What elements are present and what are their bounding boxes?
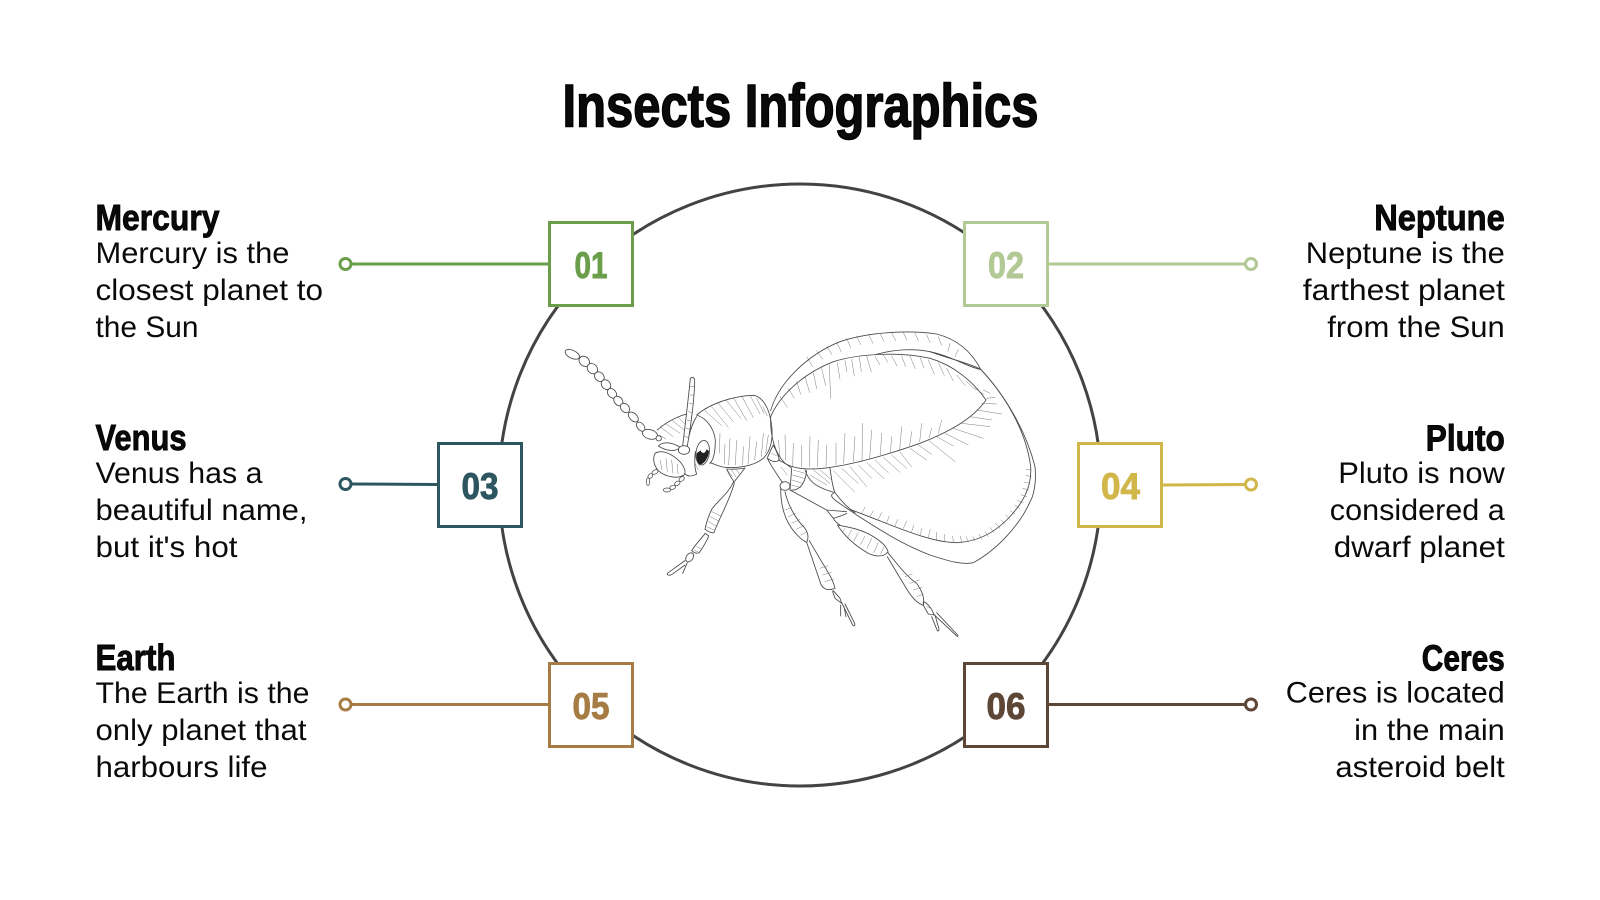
description: Pluto: considered a	[1330, 494, 1505, 527]
text block: Earth	[96, 637, 310, 784]
description: Neptune: from the Sun	[1327, 311, 1505, 344]
text block: Mercury	[96, 197, 323, 344]
large circle	[499, 184, 1101, 786]
text block: Ceres	[1286, 638, 1505, 784]
number box 03: 03	[462, 465, 498, 507]
connector line 02	[1049, 258, 1256, 270]
connector line 05	[340, 699, 549, 710]
description: Ceres: in the main	[1354, 714, 1505, 747]
beetle thorax and underside	[767, 445, 855, 513]
description: Neptune	[1303, 237, 1506, 344]
title: Insects Infographics	[562, 72, 1038, 140]
description: Venus: but it's hot	[96, 531, 238, 564]
text block: Neptune	[1303, 197, 1506, 344]
text block: Pluto	[1330, 418, 1505, 564]
description: Ceres	[1286, 676, 1505, 784]
text block: Venus	[96, 417, 308, 564]
heading: Pluto: Pluto	[1426, 418, 1505, 458]
connector line 03	[340, 478, 438, 490]
description: Mercury	[96, 237, 323, 344]
description: Mercury: the Sun	[96, 311, 198, 344]
description: Venus: beautiful name,	[96, 494, 308, 527]
connector line 01	[340, 258, 549, 270]
description: Neptune: Neptune is the	[1306, 237, 1505, 270]
beetle head and eye	[654, 413, 711, 477]
beetle front leg	[667, 468, 745, 575]
description: Pluto	[1330, 457, 1505, 564]
heading: Earth: Earth	[96, 637, 176, 678]
description: Ceres: Ceres is located	[1286, 676, 1505, 710]
description: Pluto: dwarf planet	[1334, 531, 1505, 564]
description: Earth: harbours life	[96, 751, 268, 784]
number box 06	[964, 664, 1048, 746]
beetle hind leg	[790, 490, 958, 636]
description: Mercury: Mercury is the	[96, 237, 290, 270]
number box 03	[438, 444, 522, 526]
number box 05	[550, 664, 632, 746]
beetle pronotum	[697, 395, 772, 468]
beetle underside hatching	[772, 453, 832, 488]
number box 04	[1078, 444, 1162, 526]
description: Earth	[96, 677, 310, 784]
description: Venus	[96, 457, 308, 564]
description: Mercury: closest planet to	[96, 274, 323, 307]
description: Ceres: asteroid belt	[1335, 751, 1505, 784]
beetle wing hairs	[833, 390, 1002, 492]
number box 02: 02	[988, 244, 1024, 286]
beetle wings and wing cases	[771, 332, 1035, 563]
description: Venus: Venus has a	[96, 457, 263, 490]
description: Earth: The Earth is the	[96, 677, 310, 710]
heading: Ceres: Ceres	[1422, 638, 1505, 678]
number box 01	[550, 222, 632, 306]
beetle palps	[646, 469, 685, 492]
beetle antennae	[564, 347, 695, 454]
heading: Neptune: Neptune	[1374, 197, 1505, 238]
heading: Mercury: Mercury	[96, 197, 220, 238]
number box 04: 04	[1101, 465, 1140, 507]
beetle wing hatching	[778, 333, 984, 467]
beetle middle leg	[780, 482, 855, 626]
connector line 06	[1049, 699, 1256, 710]
heading: Venus: Venus	[96, 417, 186, 458]
illustration: beetle	[564, 332, 1035, 636]
description: Pluto: Pluto is now	[1338, 457, 1505, 490]
number box 02	[964, 222, 1048, 306]
number box 05: 05	[572, 685, 610, 727]
number box 01: 01	[574, 244, 608, 286]
connector line 04	[1163, 479, 1256, 490]
description: Neptune: farthest planet	[1303, 274, 1506, 307]
number box 06: 06	[986, 685, 1026, 727]
description: Earth: only planet that	[96, 714, 307, 747]
